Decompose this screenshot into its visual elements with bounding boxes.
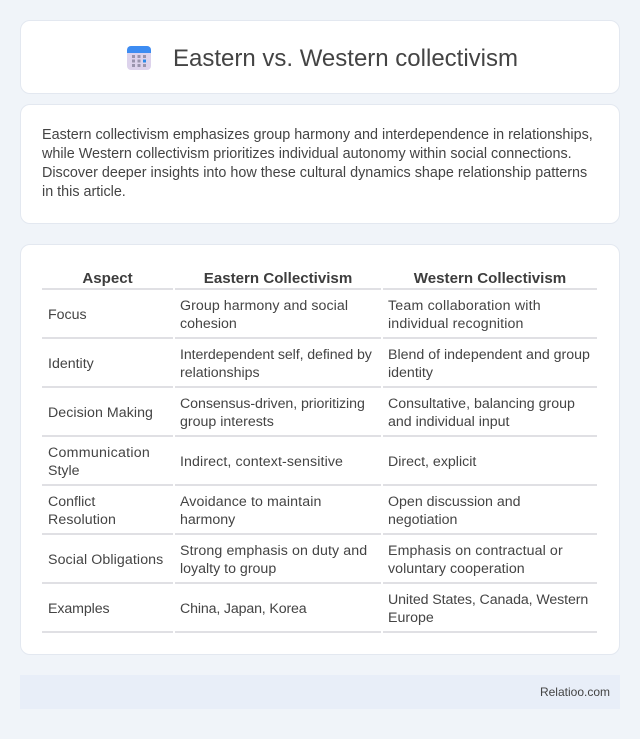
intro card	[20, 104, 620, 224]
row: Communication Style: Communication	[48, 445, 150, 461]
row: Conflict Resolution: Conflict	[48, 494, 95, 510]
row: Focus: Group harmony and social	[180, 298, 348, 314]
row: Communication Style: Indirect, context-sensitive	[180, 454, 343, 470]
row: Identity	[48, 347, 590, 381]
column heading: Aspect: Aspect	[82, 270, 133, 287]
row: Focus: Focus	[48, 307, 87, 323]
row: Social Obligations	[48, 543, 563, 577]
row: Decision Making: Consultative, balancing group	[388, 396, 575, 412]
row: Conflict Resolution: harmony	[180, 512, 235, 528]
intro text: in this article.	[42, 184, 126, 200]
row: Conflict Resolution: Avoidance to maintain	[180, 494, 321, 510]
row: Examples: Europe	[388, 610, 434, 626]
row: Decision Making: and individual input	[388, 414, 509, 430]
row: Identity: relationships	[180, 365, 260, 381]
row: Social Obligations: Emphasis on contractual or	[388, 543, 563, 559]
row: Social Obligations: loyalty to group	[180, 561, 276, 577]
row: Examples: United States, Canada, Western	[388, 592, 588, 608]
row: Conflict Resolution	[48, 494, 521, 528]
row: Examples: Examples	[48, 601, 110, 617]
intro text	[42, 127, 593, 200]
row: Identity: Blend of independent and group	[388, 347, 590, 363]
footer credit: Relatioo.com	[540, 685, 610, 699]
row: Social Obligations: Social Obligations	[48, 552, 163, 568]
row: Conflict Resolution: negotiation	[388, 512, 457, 528]
row: Focus: individual recognition	[388, 316, 524, 332]
row: Identity: Identity	[48, 356, 94, 372]
row: Identity: Interdependent self, defined by	[180, 347, 372, 363]
row: Communication Style: Direct, explicit	[388, 454, 476, 470]
row: Communication Style	[48, 445, 476, 479]
column heading: Western: Western Collectivism	[414, 270, 566, 287]
footer	[20, 675, 620, 709]
row: Communication Style: Style	[48, 463, 80, 479]
row: Social Obligations: voluntary cooperation	[388, 561, 525, 577]
intro text: while Western collectivism prioritizes individual autonomy within social connections.	[42, 146, 572, 162]
row: Focus	[48, 298, 541, 332]
icon: calendar	[127, 46, 151, 70]
row: Decision Making	[48, 396, 575, 430]
row: Conflict Resolution: Resolution	[48, 512, 116, 528]
table card	[20, 244, 620, 655]
row: Decision Making: group interests	[180, 414, 274, 430]
title: Eastern vs. Western collectivism	[173, 45, 518, 72]
title card	[20, 20, 620, 94]
row: Focus: Team collaboration with	[388, 298, 541, 314]
row: Decision Making: Consensus-driven, prioritizing	[180, 396, 365, 412]
row: Examples: China, Japan, Korea	[180, 601, 307, 617]
row: Identity: identity	[388, 365, 433, 381]
intro text: Eastern collectivism emphasizes group harmony and interdependence in relationships,	[42, 127, 593, 143]
row: Decision Making: Decision Making	[48, 405, 153, 421]
row: Social Obligations: Strong emphasis on duty and	[180, 543, 367, 559]
row: Focus: cohesion	[180, 316, 237, 332]
row: Conflict Resolution: Open discussion and	[388, 494, 521, 510]
row: Examples	[48, 592, 588, 626]
column heading: Eastern: Eastern Collectivism	[204, 270, 352, 287]
intro text: Discover deeper insights into how these cultural dynamics shape relationship patterns	[42, 165, 587, 181]
